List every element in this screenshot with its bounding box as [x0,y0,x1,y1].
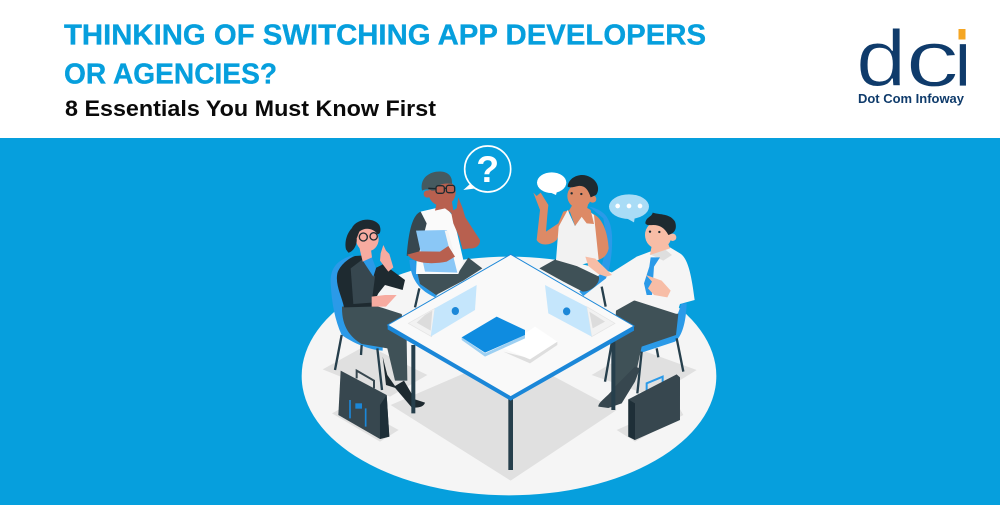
logo: Dot Com Infoway: c [906,14,959,104]
briefcase left [338,371,389,439]
subtitle: 8 Essentials You Must Know First [65,96,437,121]
laptop left [408,285,477,337]
shirt [416,206,463,274]
sleeve [407,212,427,257]
person: man with blue tie [585,213,695,408]
head [645,221,672,249]
far lower leg and shoe [383,357,397,388]
hair [645,213,676,235]
table edge [388,325,634,401]
title: OR AGENCIES? [64,58,277,90]
neck [569,203,588,226]
blue background panel [0,138,1000,505]
shoes [598,367,640,408]
jacket [337,255,405,307]
hair [422,172,452,191]
hair [568,175,598,197]
shirt [605,247,695,314]
table [388,254,634,470]
legs [539,259,599,292]
title: THINKING OF SWITCHING APP DEVELOPERS [64,20,706,52]
blouse [363,257,376,277]
person: man with folder [407,172,482,307]
gesturing hand [585,257,612,277]
top [556,209,599,266]
raised arm [451,197,480,249]
head [356,227,379,251]
white papers [503,327,557,363]
speech bubble: question mark: ? [476,148,499,190]
glasses [428,185,455,193]
neck [359,247,372,262]
speech bubble: question mark [463,146,511,192]
white floor ellipse [302,257,716,495]
person: woman in black suit [331,220,425,408]
trousers [342,305,407,381]
chest hand [646,275,671,297]
speech bubble: plain [537,172,566,195]
left arm [533,193,570,244]
chair [331,255,383,351]
hand [576,206,594,224]
title [64,20,706,90]
hair [345,220,380,253]
briefcase right [628,374,680,440]
lower hand [372,295,397,307]
speech bubble: ellipsis [609,194,649,222]
forearm [407,246,455,263]
trousers [613,300,678,389]
header band [0,0,1000,138]
head [428,179,456,206]
logo: Dot Com Infoway: Dot Com Infoway [858,92,964,106]
tie [644,257,660,295]
raised hand [380,245,393,272]
collar [649,247,672,261]
table top [388,254,634,397]
chair [579,207,612,296]
right arm [592,213,609,260]
shoe [394,381,425,408]
folder [416,230,457,273]
laptop right [545,285,615,337]
face features [570,192,573,194]
face features [649,230,651,233]
neck [650,240,670,255]
blue folder [462,317,525,357]
glasses [359,233,377,241]
neck [435,200,454,215]
table legs [413,342,613,413]
person: woman in white top [533,175,612,307]
chair [637,303,687,353]
logo: Dot Com Infoway [856,14,972,106]
legs [417,258,482,295]
head [567,184,591,208]
logo: Dot Com Infoway: d [856,15,906,104]
floor shadows [323,345,697,481]
jacket panel [351,260,375,304]
chair [409,260,440,297]
meeting illustration [302,146,716,495]
logo: Dot Com Infoway: i [954,14,972,103]
